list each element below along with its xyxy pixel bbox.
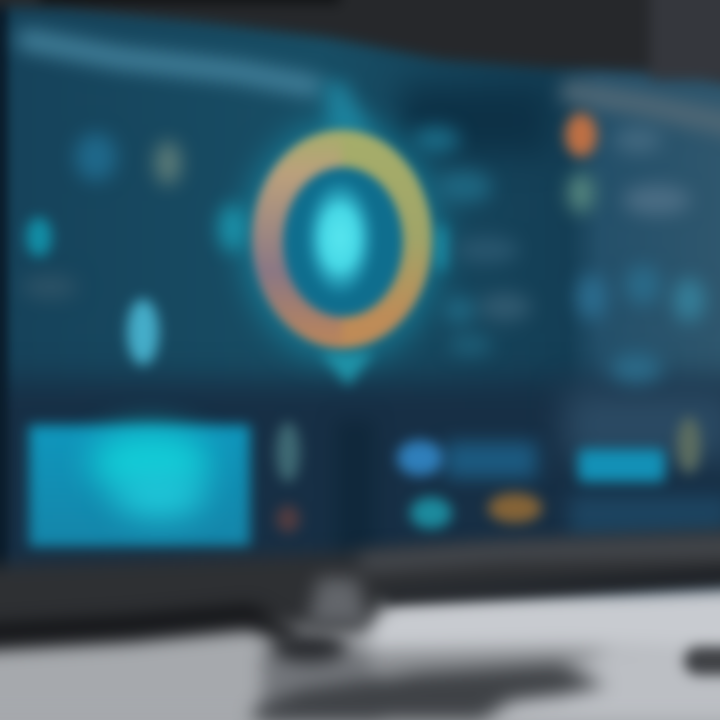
bezel lower shadow [0, 615, 295, 640]
icon: centre blue dot [625, 265, 661, 305]
ring segments [252, 130, 432, 348]
monitor stand [272, 578, 368, 662]
right panel [565, 113, 705, 383]
panel highlight [90, 430, 210, 494]
desk object right [684, 647, 720, 675]
bar: cyan wide [578, 449, 665, 482]
icon: teal dot [26, 217, 52, 257]
core [304, 178, 376, 298]
icon: blue dot [577, 274, 607, 320]
bezel shadow right [385, 574, 720, 597]
icon: teal dot [673, 278, 705, 322]
icon: blue dot [75, 133, 117, 181]
bottom middle widgets [397, 440, 542, 529]
icon: amber dot [488, 493, 542, 523]
icon: olive dot [155, 141, 181, 185]
desk shadow: large object [250, 664, 606, 720]
stand foot shadow [272, 634, 348, 662]
dark wall above the monitor [0, 0, 720, 88]
bar: grey-teal [276, 422, 300, 482]
panel lower glow [115, 473, 205, 517]
title bar [28, 40, 312, 86]
icon: lower teal dot [610, 353, 662, 383]
left widgets [22, 133, 181, 365]
monitor bezel [0, 530, 720, 650]
icon: orange dot [565, 113, 597, 157]
side glow left [218, 204, 246, 252]
slim bar widget [276, 422, 300, 533]
bar: dark blue [445, 442, 537, 478]
large cyan panel [29, 425, 250, 547]
icon: pale blue capsule [127, 299, 159, 365]
screen top highlight [562, 90, 720, 128]
icon: teal dot [410, 497, 452, 529]
label: muted row [22, 275, 78, 299]
beam above the ring [322, 82, 372, 135]
icon: green dot [568, 173, 594, 213]
icon: blue dot [397, 440, 443, 476]
desk surface [0, 585, 720, 720]
label: muted row [614, 127, 662, 153]
bar: olive [677, 417, 701, 473]
side glow right [433, 224, 449, 272]
panel base [29, 425, 250, 547]
chart glow [242, 120, 442, 360]
pointer below the ring [320, 352, 374, 386]
dot: rust [276, 505, 300, 533]
label: muted row [623, 185, 691, 215]
ring inner [283, 167, 403, 317]
middle text rows [412, 126, 531, 355]
donut chart [218, 120, 449, 386]
bezel highlight right [360, 546, 720, 563]
stand neck [308, 578, 368, 625]
